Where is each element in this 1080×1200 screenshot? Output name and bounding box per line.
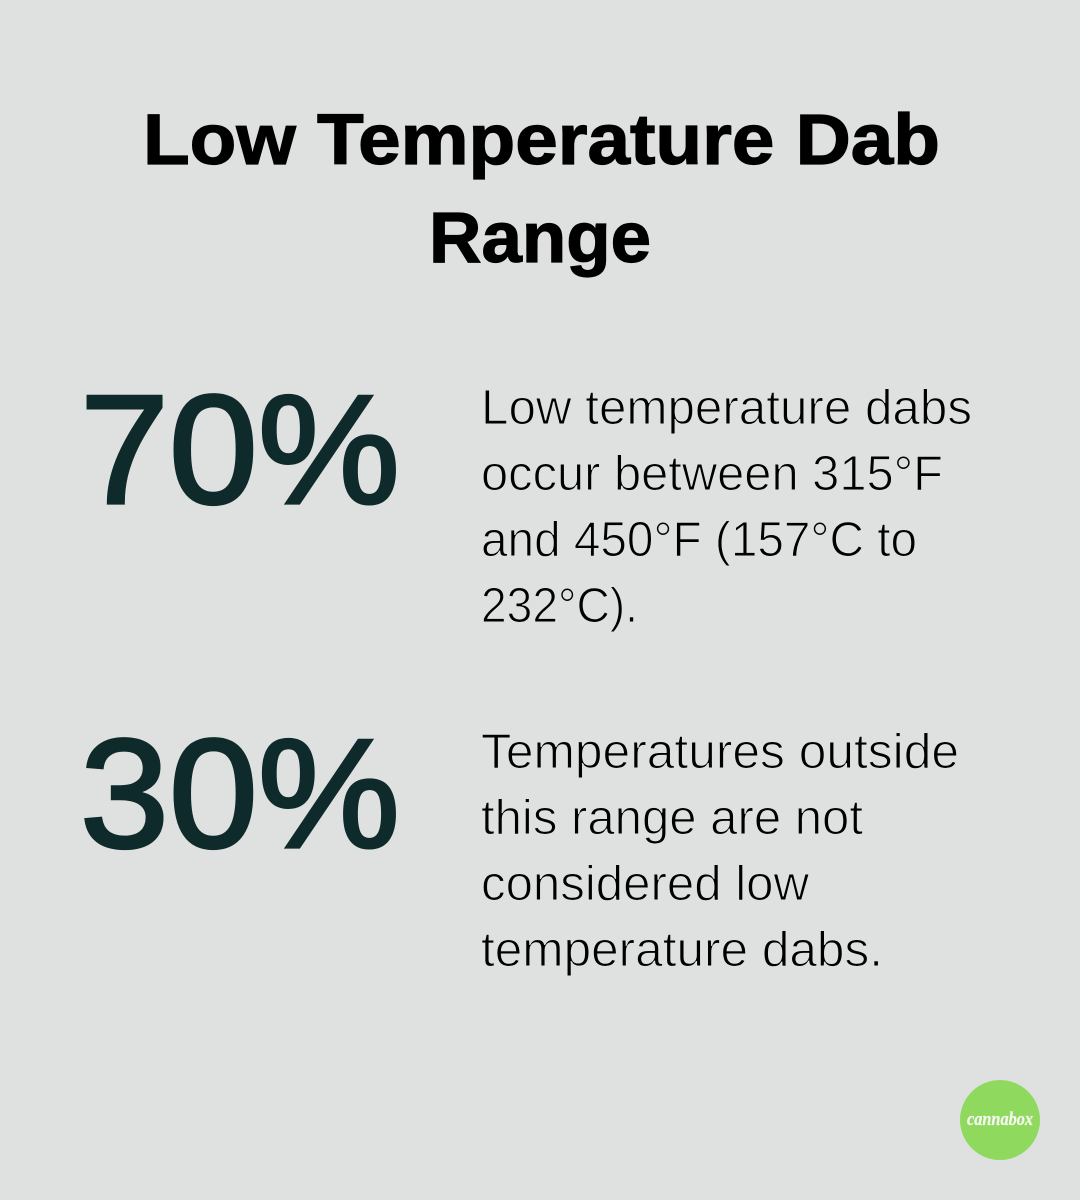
stat: 70%: 70% xyxy=(80,363,400,536)
description: 70% stat: 232°C). xyxy=(481,579,638,633)
description: 70% stat: Low temperature dabs xyxy=(481,381,972,435)
logo: cannabox badge xyxy=(960,1080,1040,1160)
description: 30% stat xyxy=(481,725,959,977)
description: 70% stat: and 450°F (157°C to xyxy=(481,513,917,567)
description: 30% stat: this range are not xyxy=(481,791,863,845)
title xyxy=(143,101,940,278)
description: 30% stat: considered low xyxy=(481,857,810,911)
description: 30% stat: temperature dabs. xyxy=(481,923,883,977)
title: Low Temperature Dab xyxy=(143,101,940,180)
description: 70% stat: occur between 315°F xyxy=(481,447,943,501)
stat: 30%: 30% xyxy=(80,707,400,880)
title: Range xyxy=(429,199,651,278)
description: 30% stat: Temperatures outside xyxy=(481,725,959,779)
description: 70% stat xyxy=(481,381,972,633)
logo: cannabox badge: cannabox xyxy=(967,1109,1033,1130)
